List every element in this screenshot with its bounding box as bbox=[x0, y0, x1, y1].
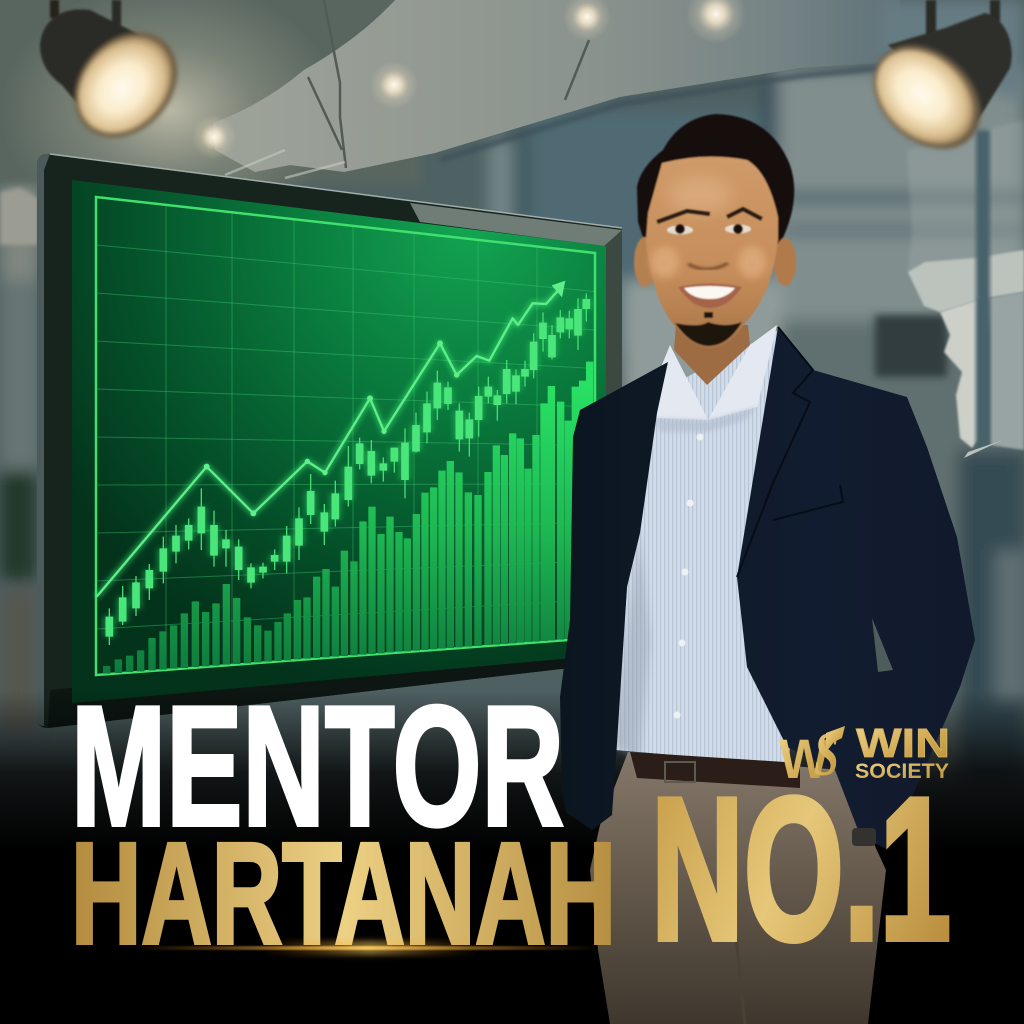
spotlight: right bbox=[853, 0, 1012, 170]
concrete ceiling bbox=[0, 0, 420, 185]
ceiling cracks bbox=[308, 0, 589, 168]
screen bbox=[72, 180, 606, 703]
chart grid bbox=[96, 205, 595, 672]
logo wordmark: SOCIETY: SOCIETY bbox=[855, 760, 949, 783]
nose bbox=[688, 263, 728, 269]
eyes bbox=[667, 224, 751, 234]
neck bbox=[674, 325, 750, 385]
shirt collar bbox=[653, 325, 777, 420]
head bbox=[634, 114, 796, 348]
eyebrows bbox=[657, 209, 762, 222]
headline: HARTANAH: HARTANAH bbox=[71, 813, 616, 974]
ears bbox=[634, 237, 656, 287]
face bbox=[646, 157, 778, 348]
blurred window panels bbox=[0, 70, 1024, 780]
golden glint under headline bbox=[130, 941, 600, 955]
watch bbox=[852, 828, 876, 846]
belt with buckle bbox=[630, 752, 800, 788]
blazer: left side bbox=[560, 362, 668, 830]
person: mentor in navy blazer bbox=[560, 114, 975, 1024]
bottom dark fade bbox=[0, 690, 1024, 1024]
left wall patch bbox=[0, 188, 38, 245]
trend line with arrow bbox=[97, 281, 565, 597]
goatee bbox=[675, 312, 742, 346]
blazer pocket bbox=[773, 485, 843, 520]
trousers bbox=[590, 752, 886, 1024]
shirt bbox=[615, 330, 790, 765]
monitor bbox=[37, 154, 622, 728]
candlestick wicks bbox=[109, 293, 586, 645]
logo: Win Society bbox=[779, 720, 950, 790]
ceiling lights bbox=[563, 0, 611, 41]
spotlight: left bbox=[40, 0, 198, 158]
logo wordmark: WIN: WIN bbox=[856, 720, 950, 766]
volume bars bbox=[107, 362, 590, 674]
brushed concrete overlay bbox=[907, 120, 1024, 458]
dark cabinet behind shoulder bbox=[875, 315, 947, 377]
candlestick bodies bbox=[109, 299, 586, 637]
gap between arm and body bbox=[872, 618, 893, 672]
smile bbox=[678, 284, 742, 308]
logo mark: S bbox=[814, 721, 839, 789]
hair bbox=[637, 114, 794, 244]
blazer lapel edge bbox=[737, 327, 813, 577]
monitor bezel bbox=[37, 154, 622, 728]
blazer: right side bbox=[737, 327, 975, 850]
candlestick glow bbox=[109, 299, 586, 637]
shirt buttons bbox=[674, 434, 704, 718]
logo mark: W bbox=[779, 727, 829, 790]
chart frame bbox=[96, 197, 595, 675]
headline: MENTOR: MENTOR bbox=[71, 671, 564, 862]
